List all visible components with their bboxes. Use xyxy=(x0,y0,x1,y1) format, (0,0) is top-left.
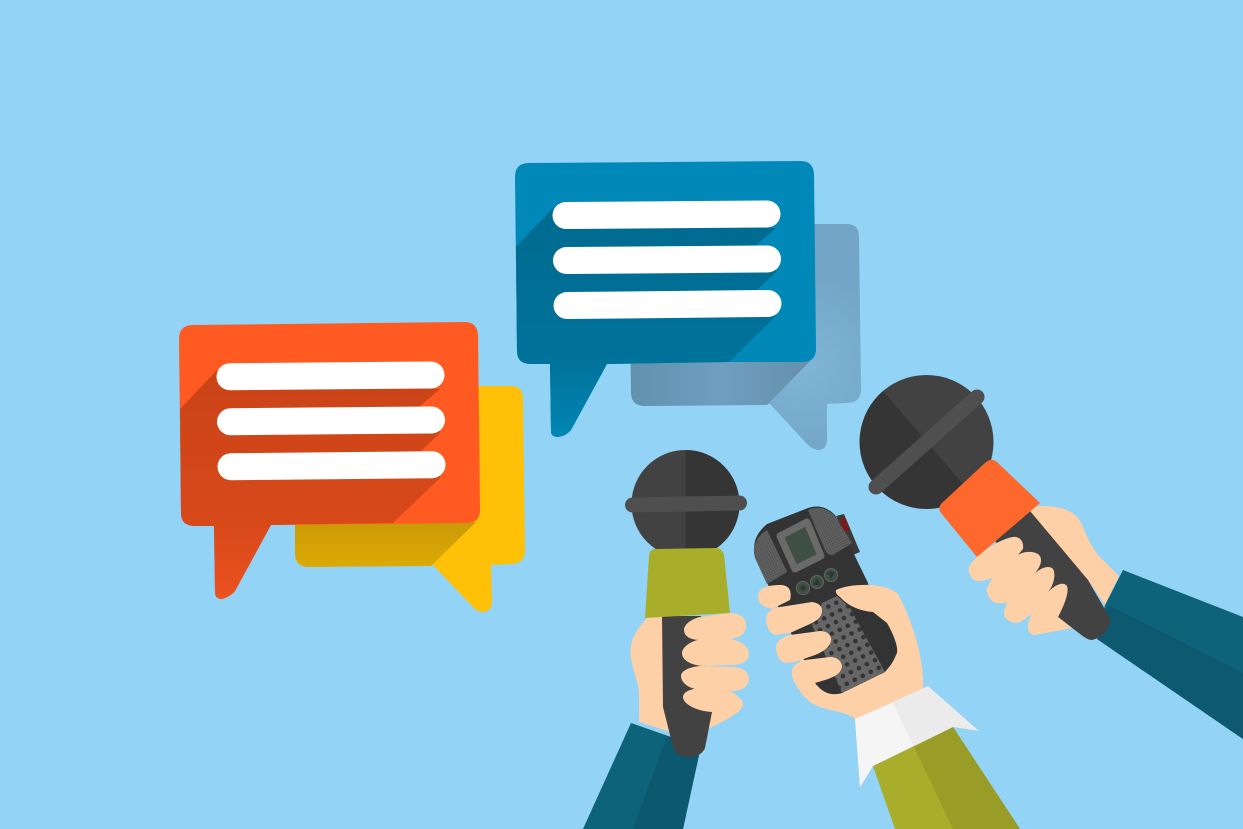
mic collar xyxy=(939,460,1040,557)
hand with microphone: right xyxy=(860,375,1243,739)
mic handle xyxy=(662,616,712,757)
text lines: blue bubble xyxy=(566,214,768,306)
side button light xyxy=(839,517,850,532)
button glyphs xyxy=(800,572,835,590)
sleeve xyxy=(583,723,699,829)
fingers xyxy=(758,585,842,700)
speaker right xyxy=(808,508,852,555)
thumb xyxy=(836,585,905,640)
speech bubble: yellow xyxy=(295,386,525,612)
mic collar xyxy=(645,548,730,618)
hand with microphone: left xyxy=(583,450,749,829)
recorder xyxy=(754,507,897,694)
speech bubble: blue xyxy=(515,161,816,437)
fingers xyxy=(969,537,1072,635)
mic handle xyxy=(990,505,1110,640)
mic head xyxy=(632,450,740,558)
hand back xyxy=(1025,506,1119,605)
cuff xyxy=(855,686,979,787)
mic head xyxy=(860,375,994,509)
hand back xyxy=(630,617,680,735)
body xyxy=(754,507,897,694)
palm xyxy=(792,585,923,719)
side button xyxy=(836,514,860,555)
buttons xyxy=(796,568,838,594)
hand with voice recorder: centre xyxy=(754,507,1020,829)
grip xyxy=(812,596,885,693)
speech bubble: orange xyxy=(179,322,480,599)
speech bubbles: ghost blue behind xyxy=(629,224,861,450)
palm xyxy=(690,680,743,730)
text lines: orange bubble xyxy=(230,375,432,467)
sleeve xyxy=(1097,570,1243,739)
sleeve xyxy=(873,727,1020,829)
screen xyxy=(780,522,821,569)
fingers xyxy=(681,613,749,712)
speaker left xyxy=(754,530,787,584)
